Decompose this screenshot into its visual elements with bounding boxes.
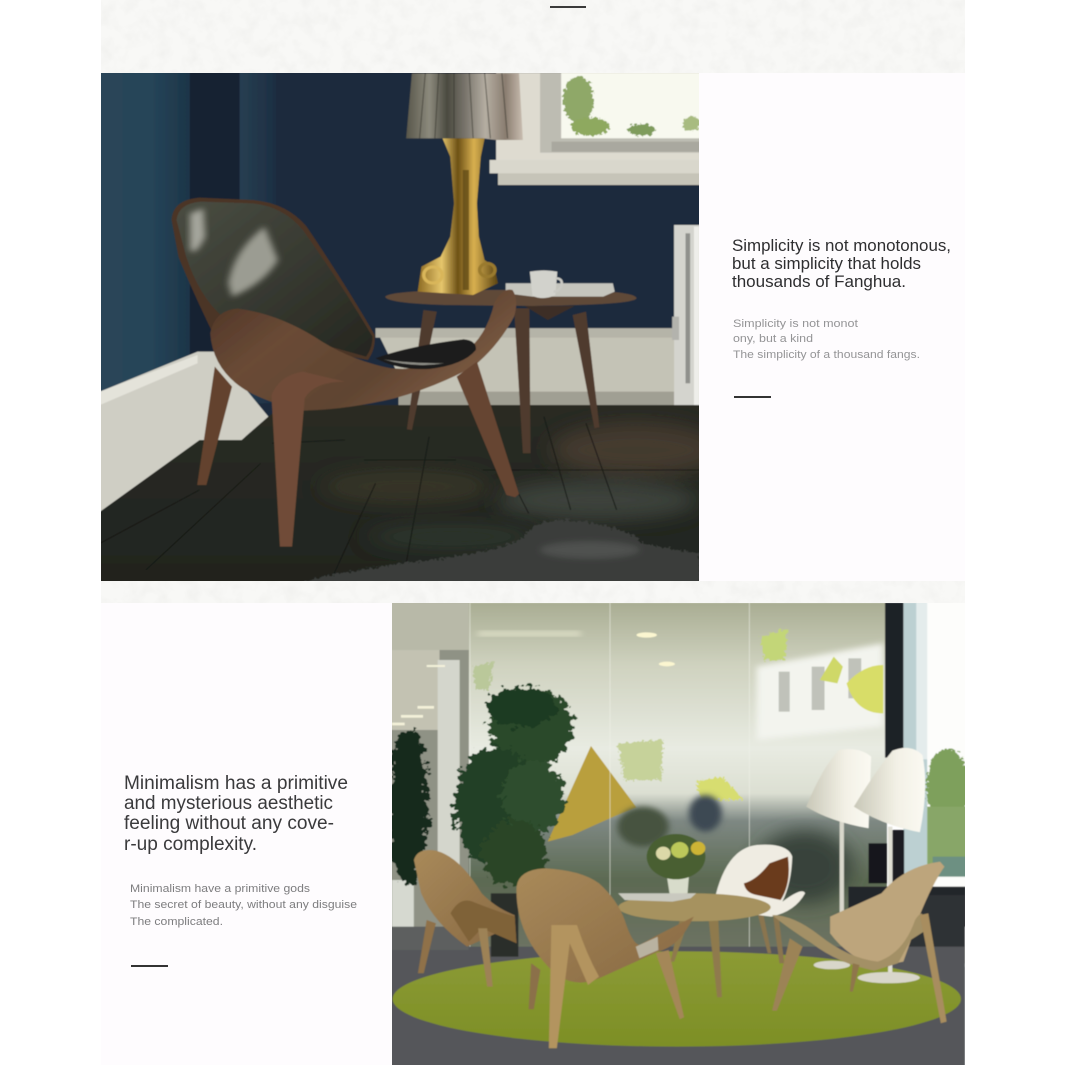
chair: leather back shell [172,198,375,360]
panel: simplicity text [699,73,965,581]
dark lower glass blots [689,795,722,832]
heading: minimalism [124,773,348,855]
heading: simplicity: Simplicity is not monotonous, [732,236,951,255]
photo: dark shell chair by a side table [100,70,720,583]
heading: simplicity: but a simplicity that holds [732,254,921,273]
photo: four shell chairs on a round green rug [388,600,969,1065]
glass reflections [473,628,883,800]
rug [393,951,961,1047]
side table top [385,290,637,306]
floor [100,405,700,583]
books [506,283,615,297]
planter [491,893,518,957]
glass panel seams [470,603,749,950]
black column and dark counter [848,603,966,963]
side table legs [407,308,599,453]
top textured band [101,0,965,73]
chair: left [414,850,517,987]
heading: simplicity: thousands of Fanghua. [732,272,906,291]
table [618,893,771,997]
chair: cowhide [716,845,805,963]
heading: minimalism: feeling without any cove- [124,813,334,834]
rug [299,520,700,583]
body text: minimalism: Minimalism have a primitive gods [130,883,311,895]
chair: centre [516,868,694,1048]
floor [390,947,965,1065]
heading: minimalism: Minimalism has a primitive [124,773,348,794]
short rule [131,965,168,967]
corridor at left [390,600,470,950]
cup [530,270,562,298]
baseboards [100,352,268,512]
chair: right [772,862,947,1023]
body text: simplicity: The simplicity of a thousand fangs. [733,349,920,361]
yellow mountain graphic [548,746,636,842]
body text: simplicity: ony, but a kind [733,333,813,345]
window [490,73,700,185]
wall [190,73,699,436]
body text: minimalism [130,883,357,928]
middle textured band [101,581,965,603]
heading: minimalism: r-up complexity. [124,834,257,855]
chair: right leg [457,362,519,497]
heading: minimalism: and mysterious aesthetic [124,793,333,814]
flowers in vase [647,834,705,900]
outside window at right [903,600,969,969]
chair: wood seat shell [210,290,516,411]
chair: seat pad [376,339,476,369]
body text: simplicity: Simplicity is not monot [733,318,858,330]
floor lamps [806,748,925,983]
body text: minimalism: The complicated. [130,916,223,928]
radiator [672,225,700,408]
table lamp shade [406,73,523,140]
glass wall [469,603,887,949]
table lamp base [418,138,498,295]
panel: minimalism text [101,603,392,1065]
chair: rear leg [197,367,232,485]
body text: simplicity [733,318,920,361]
short rule [734,396,771,398]
top short divider [550,6,586,8]
centre plant [454,687,573,887]
heading: simplicity [732,236,951,291]
chair: front leg [271,372,345,547]
left plant [388,728,429,927]
body text: minimalism: The secret of beauty, without any disguise [130,899,357,911]
